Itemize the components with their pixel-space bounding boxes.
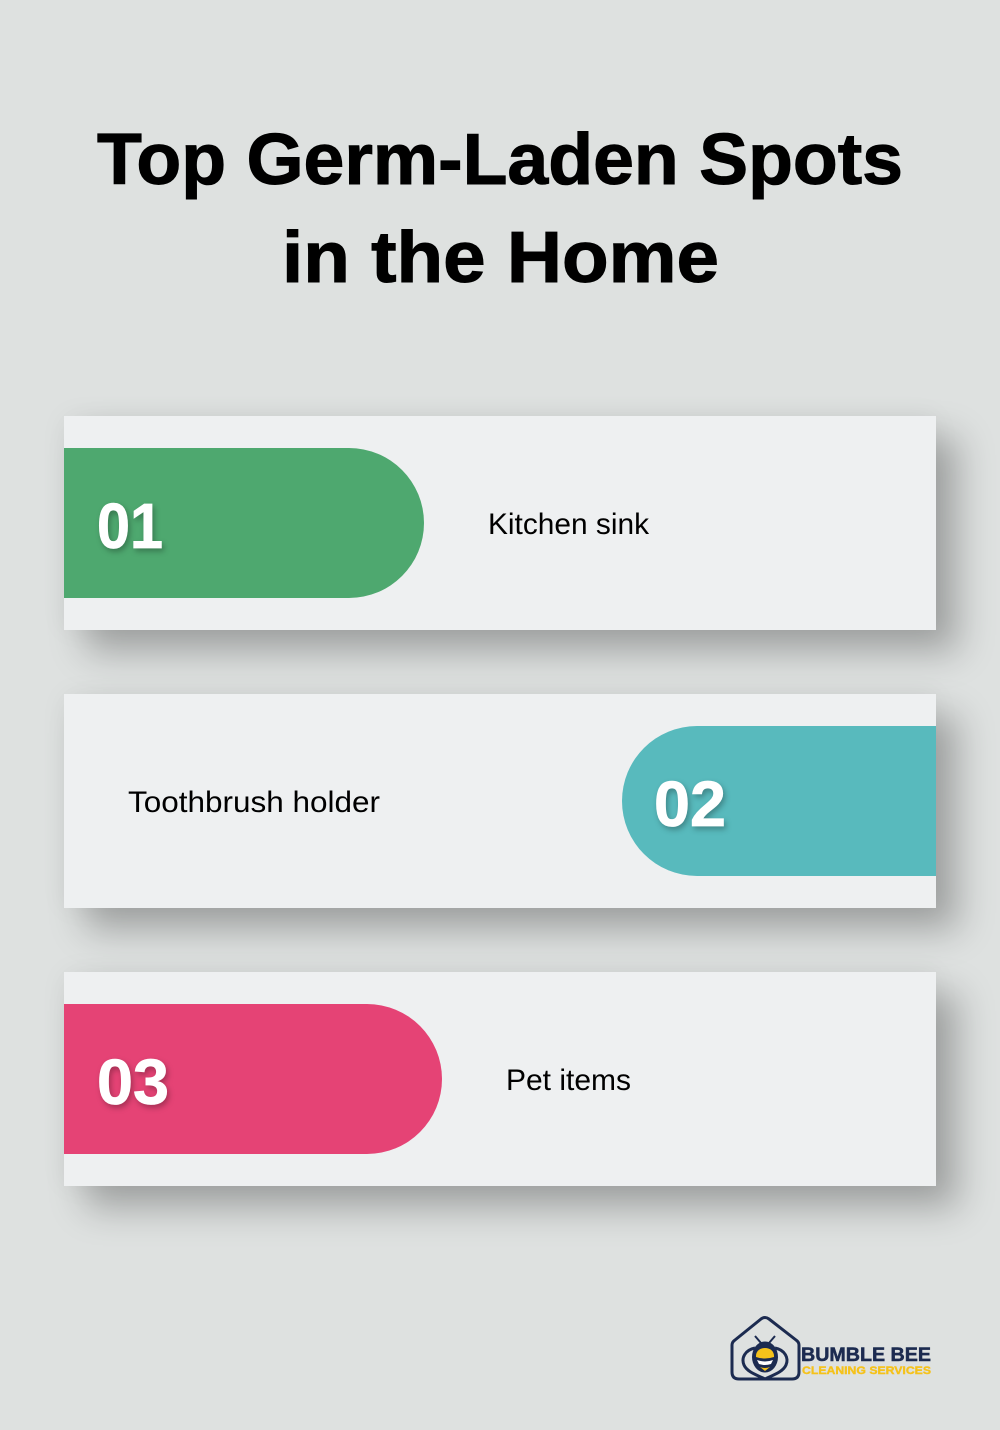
- number and label: Pet items: [506, 1064, 631, 1097]
- panel: item 02 toothbrush holder: [64, 694, 936, 908]
- number and label: [97, 1046, 631, 1118]
- number and label: 03: [97, 1046, 169, 1118]
- number and label: Toothbrush holder: [128, 786, 380, 819]
- number and label: [128, 768, 728, 840]
- title: in the Home: [282, 218, 719, 298]
- panel: item 03 pet items: [64, 972, 936, 1186]
- green pill: [64, 448, 424, 598]
- icon: house with bee: [732, 1318, 799, 1379]
- title: Top Germ-Laden Spots: [97, 120, 903, 200]
- logo wordmark: [801, 1345, 931, 1377]
- title: [97, 120, 903, 298]
- pink pill: [64, 1004, 442, 1154]
- logo wordmark: BUMBLE BEE: [801, 1345, 931, 1366]
- logo wordmark: CLEANING SERVICES: [802, 1365, 931, 1377]
- number and label: [97, 490, 650, 562]
- number and label: Kitchen sink: [488, 508, 650, 541]
- number and label: 01: [97, 490, 163, 562]
- teal pill: [622, 726, 936, 876]
- panel: item 01 kitchen sink: [64, 416, 936, 630]
- number and label: 02: [654, 768, 726, 840]
